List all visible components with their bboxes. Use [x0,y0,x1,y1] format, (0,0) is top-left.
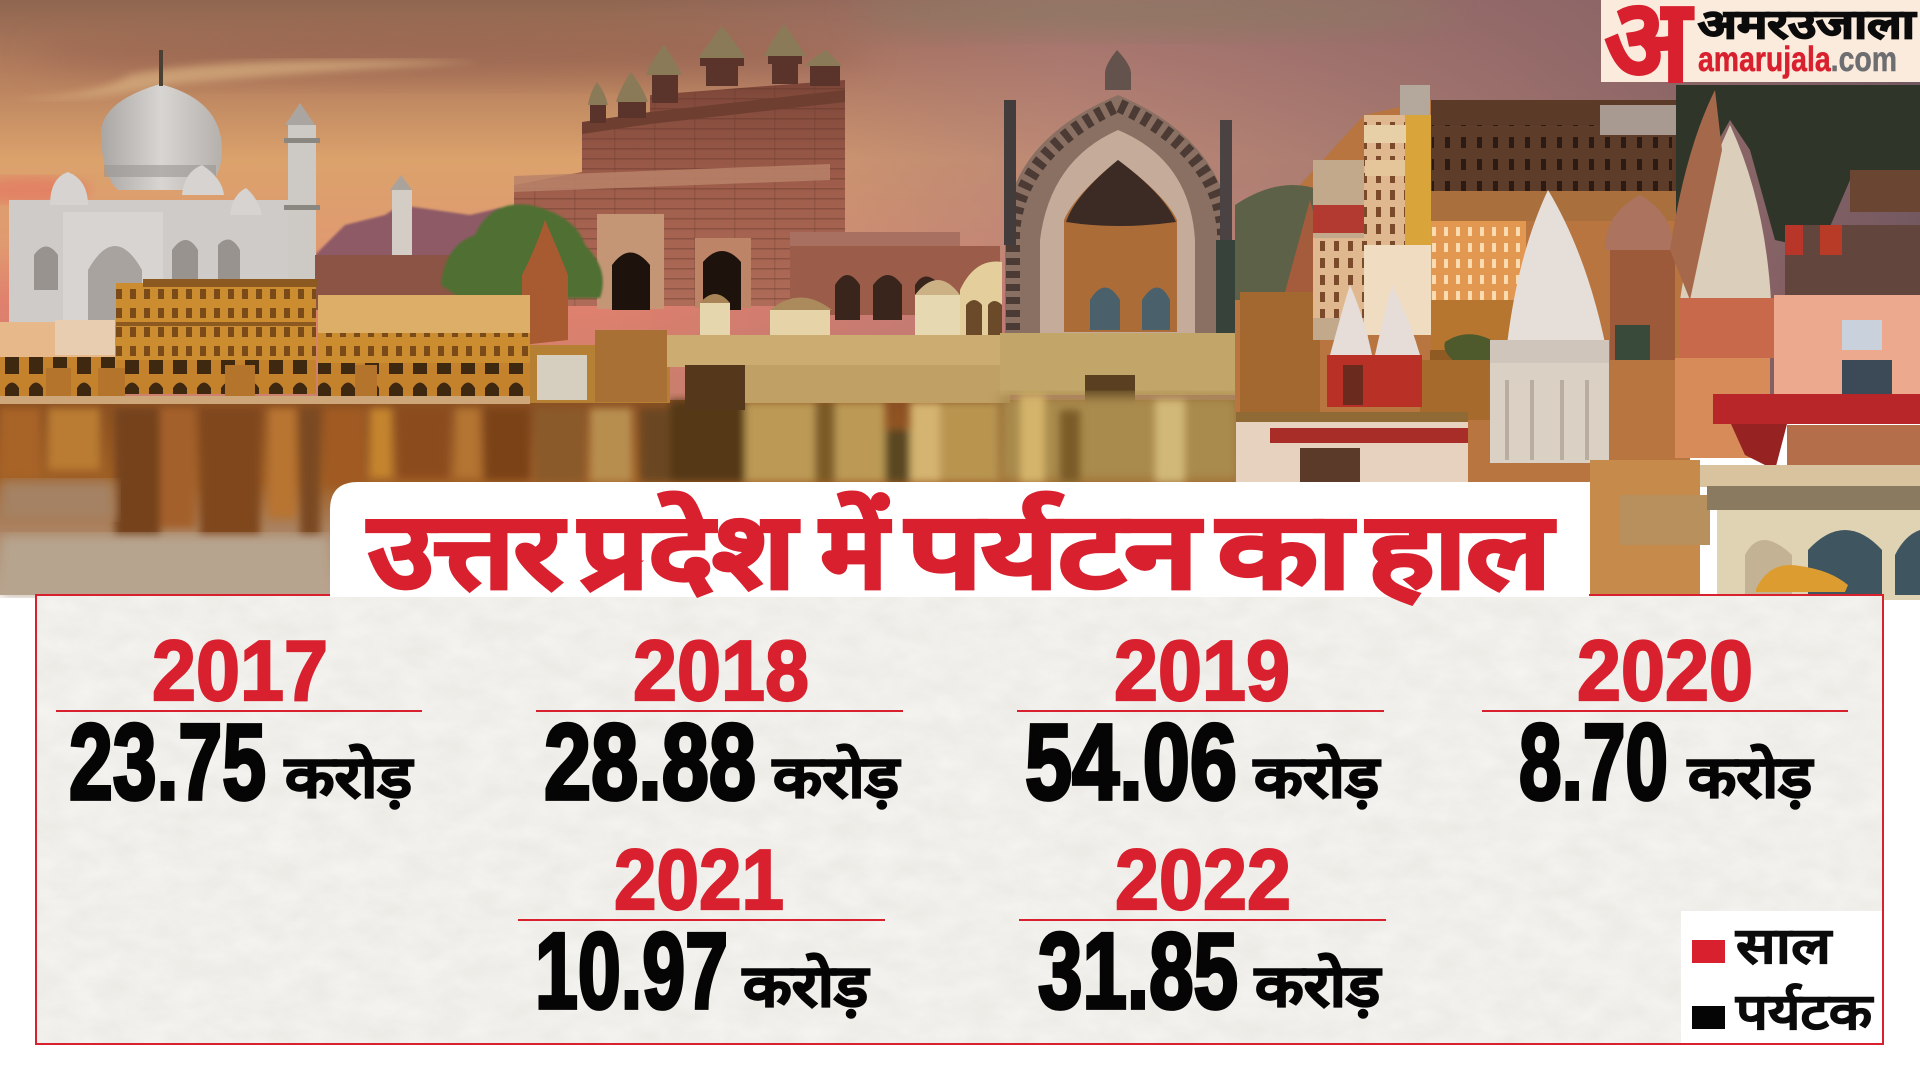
2022 entry: करोड़ [1254,953,1382,1019]
2020 entry: 2020 [1577,624,1753,719]
photo collage: landmarks of Uttar Pradesh [0,0,1920,600]
distant purple city [315,205,520,270]
water with reflections [0,400,1300,595]
ghats and sandy embankment [530,262,1240,482]
2019 entry: करोड़ [1253,744,1381,810]
2017 entry: करोड़ [284,744,414,810]
2019 entry: 2019 [1114,624,1290,719]
legend year label: साल [1735,918,1833,974]
2022 entry [1019,833,1386,1031]
2018 entry: 2018 [633,624,809,719]
2018 entry: 28.88 [544,701,756,822]
red stone tower [522,220,568,345]
logo: Amar Ujala [1601,0,1920,105]
title: उत्तर [367,494,566,610]
sky [0,0,1920,420]
Taj Mahal [9,50,460,325]
logo wordmark: अमरउजाला [1698,3,1917,47]
title: प्रदेश [578,492,799,610]
2018 entry: करोड़ [772,744,901,810]
2017 entry [56,624,422,822]
legend [1681,911,1882,1043]
2021 entry: 2021 [614,833,784,928]
title card [330,482,1589,610]
title: पर्यटन [904,492,1202,610]
2019 entry [1017,624,1384,822]
2018 entry [536,624,903,822]
title: में [819,492,891,610]
2022 entry: 31.85 [1038,910,1238,1031]
kiosks [588,24,842,105]
2020 entry [1482,624,1848,822]
panel: yearly tourist numbers [36,595,1883,1044]
Varanasi ghat buildings [1235,85,1920,600]
2021 entry: करोड़ [742,953,870,1019]
green tree [441,204,603,298]
2021 entry: 10.97 [535,910,728,1031]
2021 entry [518,833,885,1031]
logo url: amarujala.com [1698,40,1897,79]
title [367,492,1555,610]
title: हाल [1366,494,1555,610]
yellow riverside palace [0,279,530,404]
2022 entry: 2022 [1115,833,1291,928]
Fatehpur Sikri gate [514,24,1000,320]
title: का [1216,494,1356,610]
2020 entry: करोड़ [1687,744,1814,810]
2020 entry: 8.70 [1519,701,1668,822]
2017 entry: 23.75 [69,701,266,822]
legend tourist label: पर्यटक [1735,983,1874,1040]
dark trees [1676,85,1920,250]
Rumi Darwaza [1004,50,1236,335]
2017 entry: 2017 [152,624,328,719]
2019 entry: 54.06 [1025,701,1237,822]
